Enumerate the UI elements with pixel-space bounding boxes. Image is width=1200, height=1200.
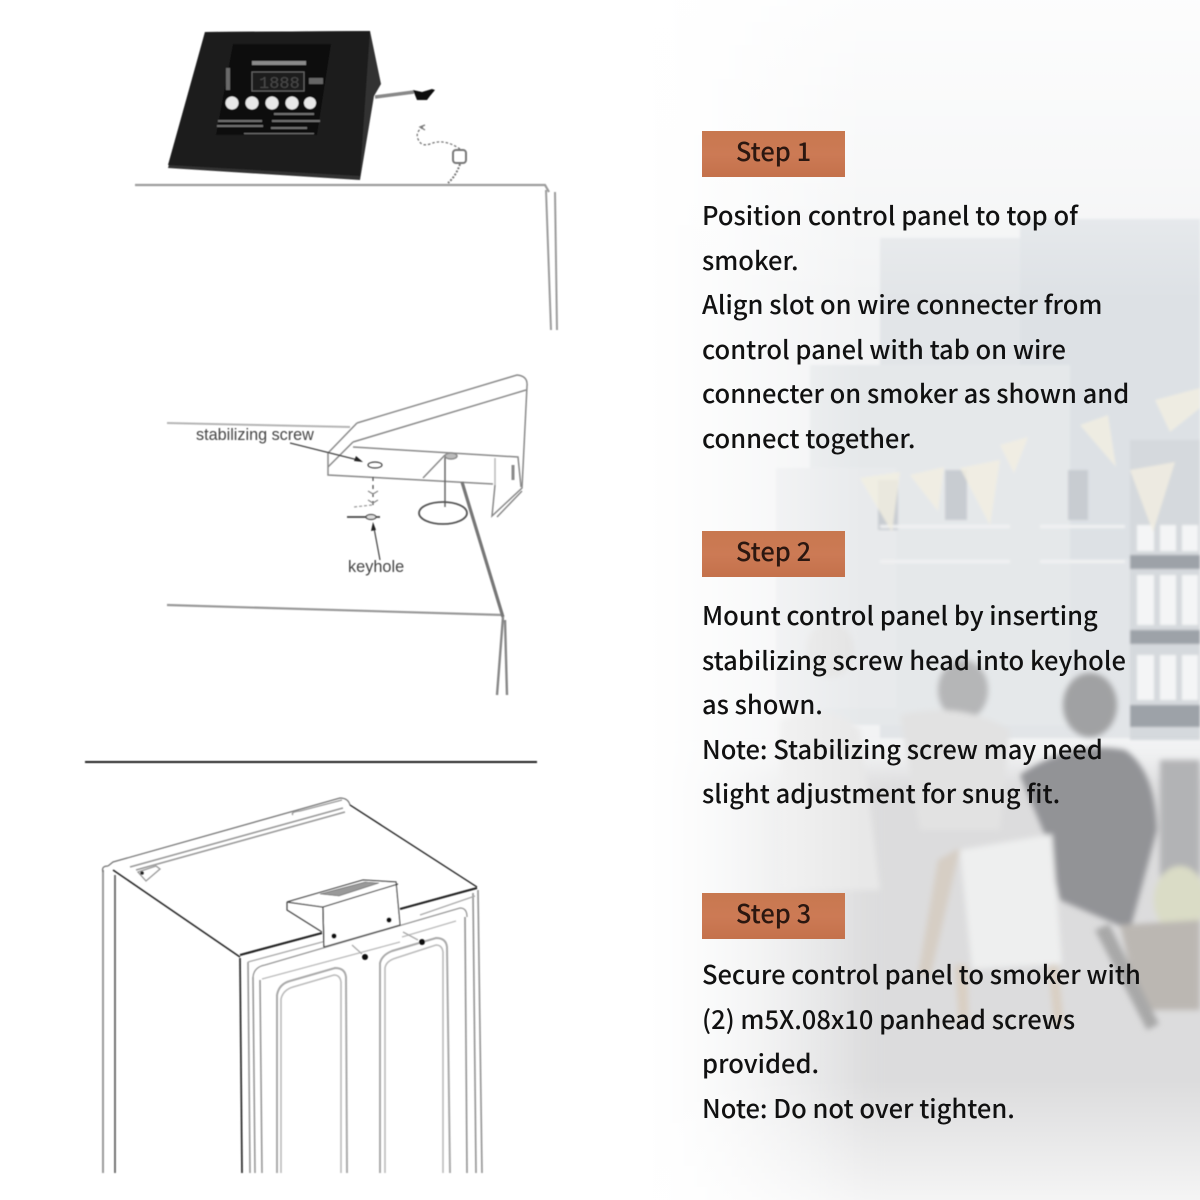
divider rule [85, 761, 537, 763]
step 3 text: Secure control panel to smoker with [702, 955, 1141, 992]
bunting [860, 388, 1200, 532]
stabilizing screw label: stabilizing screw [196, 426, 314, 444]
right door panel [380, 938, 450, 1173]
icon: black control panel [168, 31, 381, 180]
icon: black control panel: 1888 [259, 75, 300, 94]
diagram: keyhole mount [167, 375, 527, 695]
step 3 text [702, 955, 1141, 1126]
step 3 text: Note: Do not over tighten. [702, 1088, 1015, 1126]
step 1 badge [702, 131, 845, 177]
step 3 text: provided. [702, 1044, 819, 1081]
step 2 text: Mount control panel by inserting [702, 596, 1098, 633]
left door panel [277, 968, 347, 1173]
step 2 badge [702, 531, 845, 577]
step 2 text: slight adjustment for snug fit. [702, 774, 1060, 811]
step 1 text: control panel with tab on wire [702, 330, 1066, 366]
step 1 text: smoker. [702, 240, 799, 278]
side and door frame lines [102, 870, 104, 1173]
diagram: smoker with mounted control panel [103, 798, 482, 1173]
arrows and screw detail [290, 443, 382, 560]
icon: wire connector [375, 89, 435, 100]
smoker top [108, 798, 477, 887]
step 1 text: Position control panel to top of [702, 196, 1078, 233]
step 3 text: (2) m5X.08x10 panhead screws [702, 1000, 1075, 1036]
step 3 badge: Step 3 [736, 894, 811, 931]
step 1 text: Align slot on wire connecter from [702, 285, 1102, 322]
step 1 text: connect together. [702, 418, 916, 456]
step 1 badge: Step 1 [736, 132, 811, 169]
step 2 text: stabilizing screw head into keyhole [702, 640, 1126, 678]
keyhole label: keyhole [348, 558, 404, 576]
ground haze [600, 770, 1200, 1200]
smoker top edge outline [135, 185, 557, 330]
icon: chain connector [417, 125, 466, 183]
step 1 text [702, 196, 1129, 456]
step 2 text: Note: Stabilizing screw may need [702, 730, 1103, 766]
windows [878, 470, 1088, 530]
mounted panel [287, 880, 400, 947]
step 3 badge [702, 893, 845, 939]
step 2 text [702, 596, 1126, 811]
step 2 text: as shown. [702, 685, 823, 722]
step 1 text: connecter on smoker as shown and [702, 374, 1129, 411]
people [780, 622, 1200, 1030]
step 2 badge: Step 2 [736, 532, 811, 569]
